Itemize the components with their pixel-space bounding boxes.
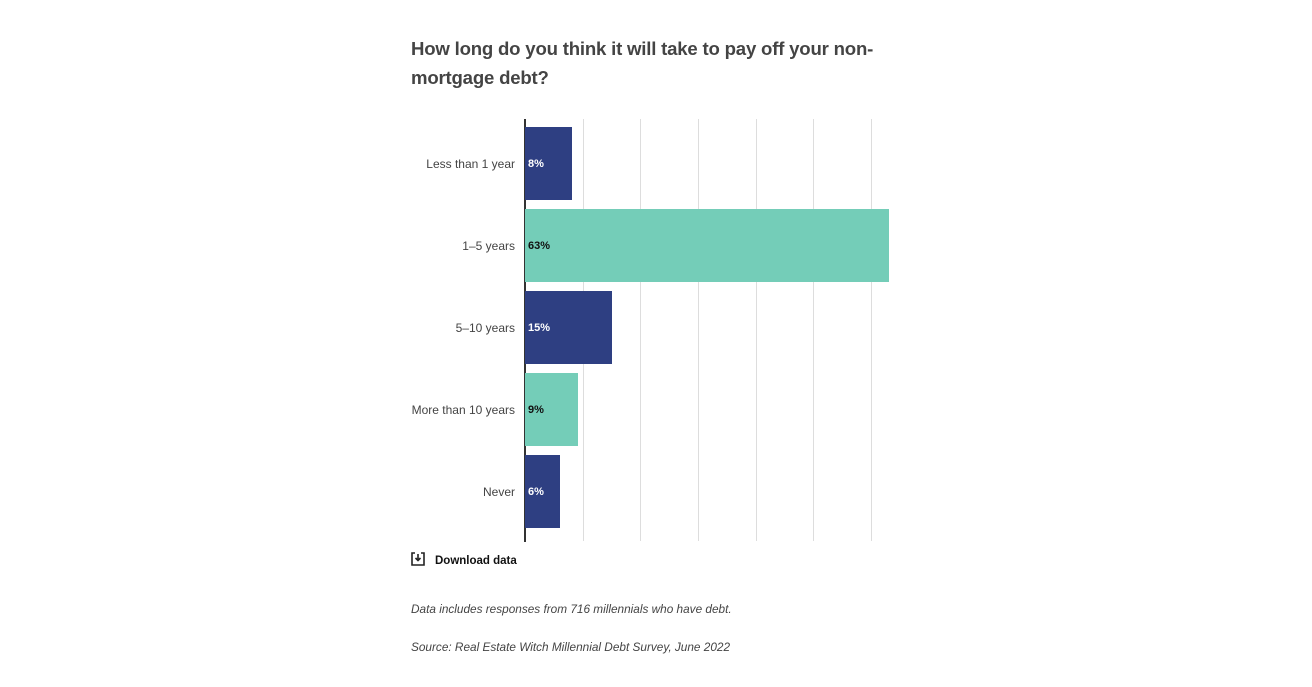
row: 5-10 years: 5–10 years [456, 321, 515, 335]
row: never: Never [483, 485, 515, 499]
row: 1-5 years: 1–5 years [462, 239, 515, 253]
bar chart: 8% [528, 158, 544, 170]
title: How long do you think it will take to pay off your non- [411, 38, 873, 59]
title [411, 38, 873, 88]
source: Source: Real Estate Witch Millennial Debt Survey, June 2022 [411, 640, 730, 654]
note: Data includes responses from 716 millennials who have debt. [411, 602, 732, 616]
bar chart: 9% [528, 404, 544, 416]
download link [411, 552, 517, 567]
icon: download [411, 552, 425, 566]
row: more than 10 years: More than 10 years [412, 403, 515, 417]
title: mortgage debt? [411, 67, 549, 88]
download link: Download data [435, 555, 517, 567]
axis [524, 119, 526, 542]
bar chart: 6% [528, 486, 544, 498]
bar chart: 15% [528, 322, 550, 334]
bar chart: 63% [528, 240, 550, 252]
bar chart [412, 119, 889, 542]
row: less than 1 year: Less than 1 year [426, 157, 515, 171]
